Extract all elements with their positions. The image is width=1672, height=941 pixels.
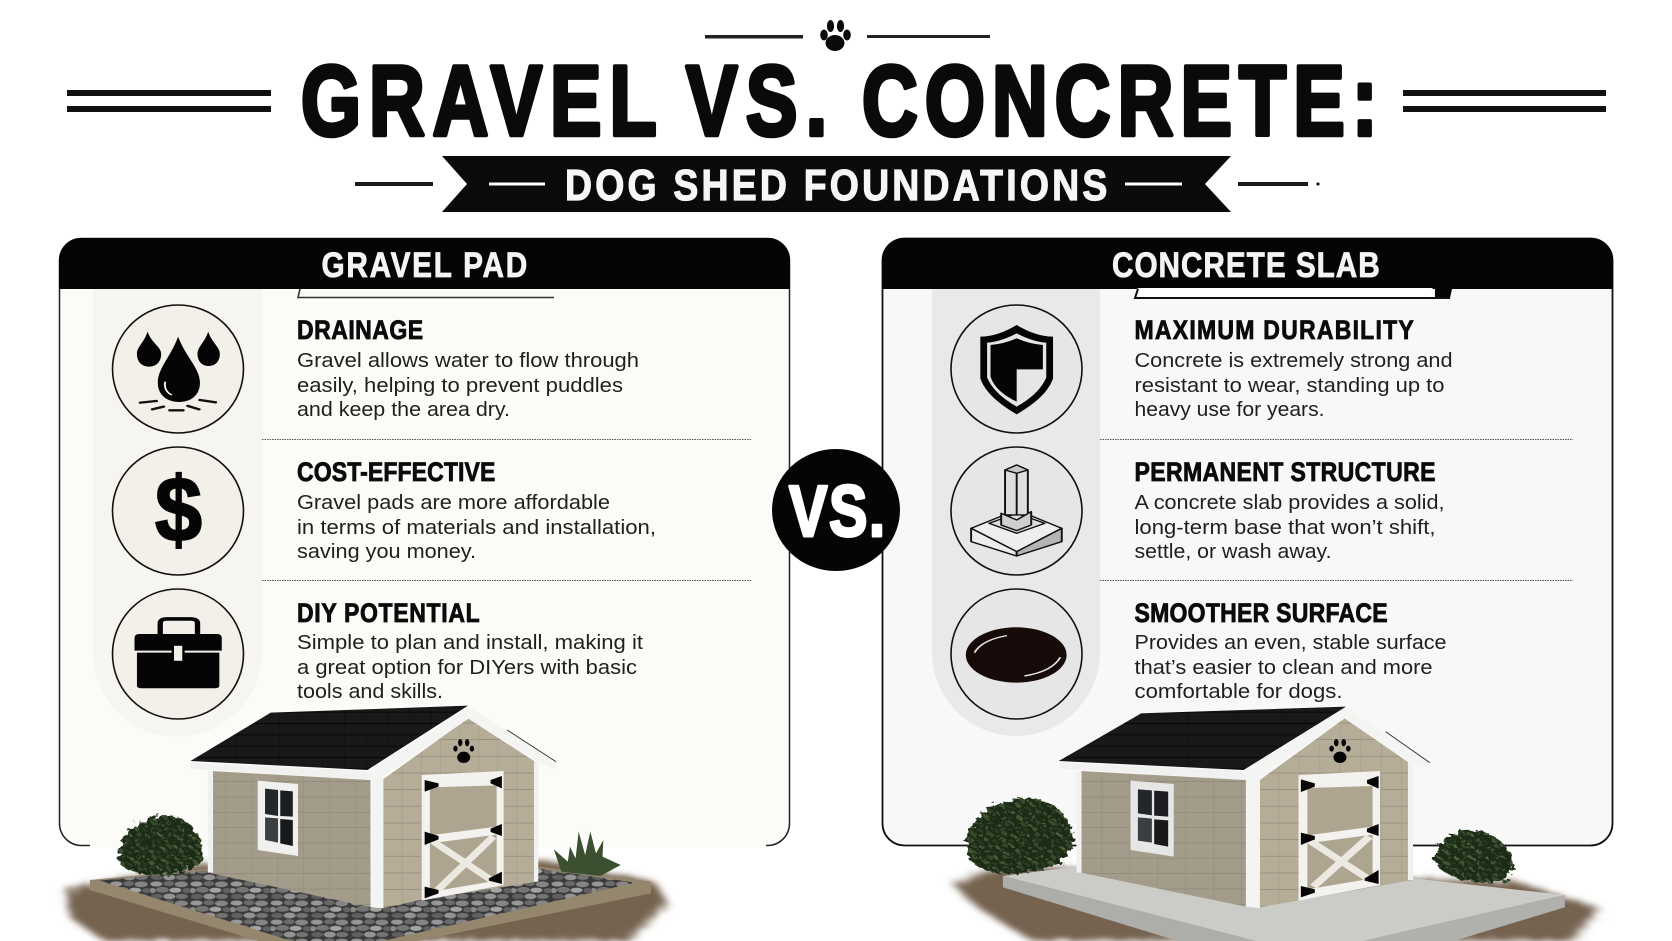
panel header [882,238,1613,289]
icon: water drops [112,305,244,433]
roof [190,706,468,770]
main title: VS. [686,46,827,156]
header underline artefact [298,289,554,298]
icon: smooth surface [951,589,1082,719]
roof [1059,707,1346,770]
shrub [118,816,202,875]
illustration: gravel shed [65,706,668,941]
panel header [59,238,790,289]
header underline artefact [1135,288,1452,298]
paw on gable [1329,739,1351,763]
text: smoother surface: that’s easier to clean and more [1134,657,1432,679]
text: permanent structure: long-term base that won’t shift, [1134,517,1436,539]
text: diy potential: DIY POTENTIAL [297,600,480,628]
right double rule [1403,90,1606,112]
gable trim [1244,707,1430,781]
paw on gable [453,739,474,763]
text: maximum durability: heavy use for years. [1134,399,1324,421]
text: drainage: and keep the area dry. [297,399,510,421]
text: permanent structure: A concrete slab provides a solid, [1134,492,1444,514]
main title: CONCRETE: [862,46,1378,156]
dirt ground [65,860,668,941]
corner post [1246,777,1260,908]
ribbon side dashes [355,182,1320,186]
shed front wall [1260,718,1413,907]
wooden frame and gravel [90,867,651,941]
window [258,781,298,856]
text: maximum durability: MAXIMUM DURABILITY [1134,317,1414,345]
icon: dollar sign: $ [155,459,202,561]
faded panel bottom edge [90,843,766,848]
illustration: concrete shed [953,707,1600,941]
shed side wall [211,771,370,907]
icon: concrete pier [951,447,1082,575]
subtitle ribbon [442,156,1231,212]
door [1299,771,1380,901]
text: diy potential: a great option for DIYers with basic [297,657,637,679]
door [422,771,504,901]
dirt ground [953,867,1600,941]
icon: dollar sign [112,447,244,575]
grass tuft [554,832,621,876]
text: drainage [297,317,639,421]
vs badge: VS. [789,471,885,551]
panel body [60,238,790,846]
panel body [882,238,1612,846]
corner post [370,777,383,908]
text: maximum durability [1134,317,1452,421]
icon band [93,289,262,736]
window [1130,781,1174,857]
panel header: CONCRETE SLAB [1112,246,1380,285]
text: maximum durability: Concrete is extremely strong and [1134,350,1452,372]
title block [67,20,1606,212]
icon: toolbox [112,589,244,719]
text: cost-effective [297,459,656,563]
text: diy potential: tools and skills. [297,681,443,703]
vs badge [772,449,900,571]
left shrub [967,798,1073,873]
panel: gravel pad [59,238,790,848]
text: cost-effective: saving you money. [297,541,476,563]
shed side wall [1081,771,1246,907]
text: diy potential: Simple to plan and install, making it [297,632,643,654]
left double rule [67,90,271,112]
right shrub [1434,830,1513,883]
text: maximum durability: resistant to wear, standing up to [1134,375,1444,397]
icon band [932,289,1100,736]
panel header: GRAVEL PAD [322,246,527,285]
subtitle ribbon: DOG SHED FOUNDATIONS [565,160,1107,210]
text: permanent structure [1134,459,1444,563]
text: smoother surface: Provides an even, stable surface [1134,632,1446,654]
main title: GRAVEL [301,46,657,156]
text: smoother surface: comfortable for dogs. [1134,681,1342,703]
text: permanent structure: PERMANENT STRUCTURE [1134,459,1436,487]
text: permanent structure: settle, or wash away. [1134,541,1332,563]
panel: concrete slab [882,238,1613,846]
text: drainage: Gravel allows water to flow through [297,350,639,372]
text: drainage: easily, helping to prevent puddles [297,375,623,397]
gable trim [367,707,556,781]
title paw icon [820,20,851,51]
icon: shield [951,305,1082,433]
text: smoother surface [1134,600,1446,703]
text: smoother surface: SMOOTHER SURFACE [1134,600,1388,628]
text: cost-effective: COST-EFFECTIVE [297,459,495,487]
top flourish lines [705,35,990,38]
text: drainage: DRAINAGE [297,317,423,345]
text: cost-effective: Gravel pads are more affordable [297,492,610,514]
concrete slab [1003,867,1565,941]
text: diy potential [297,600,643,703]
text: cost-effective: in terms of materials and installation, [297,517,656,539]
shed front wall [382,718,537,908]
main title [301,46,1378,156]
